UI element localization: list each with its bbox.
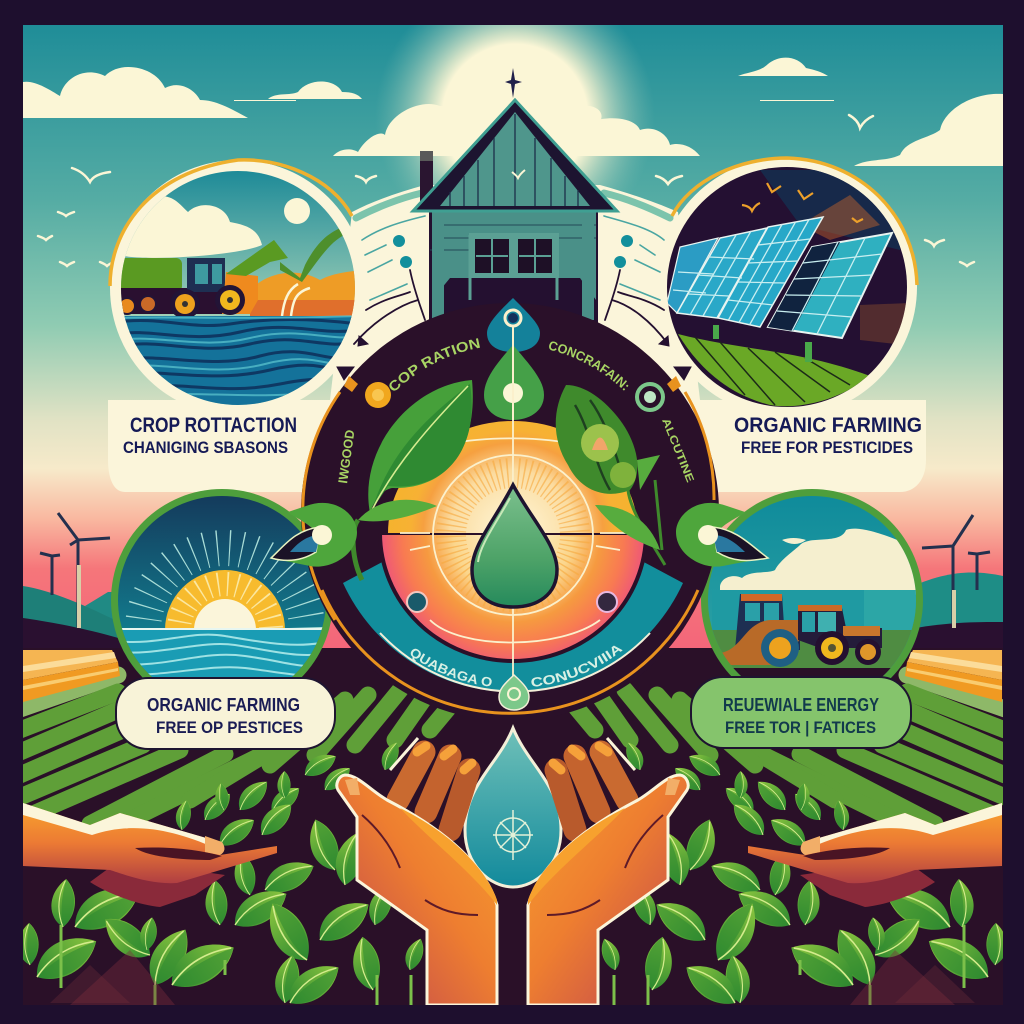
palm [337,775,497,1005]
left side hand [23,803,277,907]
barn body [429,208,598,323]
sun rays [451,473,575,597]
clouds [23,58,1003,166]
barn roof [413,100,617,211]
hills and wind turbines [23,513,1003,650]
right side hand [748,803,1002,907]
panel supports [713,325,719,339]
left big leaf [368,380,473,513]
center water drop [472,485,557,607]
text: organic farming upper [734,414,922,457]
label pill: organic farming: ORGANIC FARMING [147,695,300,715]
sun [165,570,285,628]
cloud [720,529,930,595]
dark disc [301,303,719,721]
panel: right circle solar panels [665,158,917,410]
teal band [343,560,683,692]
left centre hand [337,738,497,1005]
left eye leaf [270,503,357,567]
tanker tractor [120,258,182,292]
tractor two [798,608,882,648]
panel: sun over sea [111,489,332,678]
crop rows and seedlings right [570,650,1009,1015]
guide lines [400,325,626,690]
ring labels [335,338,696,686]
bottom centre water drop [465,728,561,887]
fingers [398,752,469,830]
sun rays [126,530,324,628]
panel: left circle tractor and water [110,160,360,406]
tractor one [735,594,800,650]
central circular diagram [270,298,770,715]
waves [118,316,358,406]
right eye leaf [676,503,768,567]
text: organic farming upper: ORGANIC FARMING [734,414,922,437]
text: organic farming upper: FREE FOR PESTICIDES [741,438,913,457]
ring labels: CONCRAFAIN: [549,342,628,391]
wheels [761,629,799,667]
ring labels: IWGOOD [335,429,357,484]
green ring [701,489,923,711]
orange ring [303,392,340,620]
birds [38,115,974,266]
ring labels: QUABAGA O [410,648,492,686]
cream backdrop panel [108,157,926,492]
label pill: renewable energy: REUEWIALE ENERGY [723,695,879,715]
atom symbol in drop [493,810,533,860]
cream wing details and connector arrows [337,193,691,380]
barn [413,68,617,323]
orange arc [672,158,917,285]
tractor wheels [174,289,196,316]
orange arc [110,160,352,286]
sea [122,629,322,677]
field [678,334,870,406]
cross finial [505,68,522,98]
text: crop rotation: CHANIGING SBASONS [123,438,288,457]
right centre hand [528,738,688,1005]
label pill: renewable energy [691,677,911,748]
birds [742,183,863,222]
label pill: renewable energy: FREE TOR | FATICES [725,718,876,737]
orange hills [258,271,355,320]
right leaf with buds [556,385,637,494]
sun glow behind barn [375,0,655,257]
sky [23,25,1003,650]
ring labels: CONUCVIIIA [531,646,623,686]
text: crop rotation: CROP ROTTACTION [130,414,297,437]
green ring [111,489,333,711]
green drop [484,345,544,420]
ring labels: COP RATION [389,338,480,391]
panel: tractors [701,489,923,678]
cloud [118,196,262,258]
chimney [420,151,433,201]
top teal drop [487,298,540,352]
text: crop rotation [123,414,297,457]
lower small leaf [358,500,437,521]
label pill: organic farming [116,678,335,749]
solar panels [667,238,718,313]
crop rows and seedlings left [16,650,455,1015]
field ground [23,648,1003,1005]
icon badges [365,382,663,710]
barn windows [469,233,559,278]
ring labels: ALCUTINE [659,417,696,484]
upper sun half [388,421,638,533]
lower pink half [380,533,646,661]
label pill: organic farming: FREE OP PESTICES [156,718,303,737]
